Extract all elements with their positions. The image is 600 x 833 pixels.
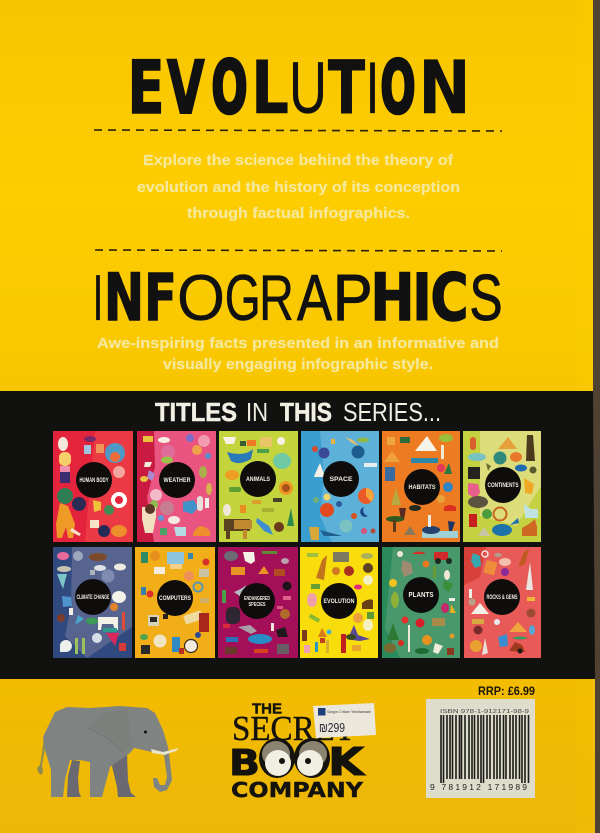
logo: The Secret Book Company: B	[229, 743, 260, 784]
book: Weather: WEATHER	[164, 477, 191, 484]
spine edge	[577, 0, 600, 833]
title: Evolution: O	[212, 46, 248, 130]
title: Infographics: G	[225, 261, 261, 334]
book: Space: SPACE	[330, 476, 353, 483]
book: Animals	[219, 431, 298, 542]
title: Infographics: H	[370, 261, 414, 336]
intro text: Explore the science behind the theory of	[143, 152, 454, 169]
icon: elephant	[37, 706, 179, 797]
book: Evolution	[300, 547, 378, 658]
book: Human Body: HUMAN BODY	[80, 477, 109, 484]
RRP price: RRP: £6.99	[478, 686, 535, 698]
book: Endangered Species: ENDANGERED	[244, 596, 270, 602]
series heading: TITLES	[155, 397, 237, 427]
intro text: through factual infographics.	[187, 205, 410, 222]
book: Rocks & Gems	[464, 547, 541, 658]
title: Infographics: I	[92, 261, 104, 334]
book: Continents	[463, 431, 541, 542]
logo: The Secret Book Company	[229, 702, 366, 802]
series heading: SERIES...	[343, 397, 441, 427]
book: Computers: COMPUTERS	[159, 595, 192, 602]
series description: visually engaging infographic style.	[163, 356, 433, 373]
title: Evolution: U	[289, 48, 327, 129]
series description: Awe-inspiring facts presented in an informative and	[97, 335, 499, 352]
book: Evolution: EVOLUTION	[324, 598, 355, 605]
series description	[97, 335, 499, 373]
book: Human Body	[53, 431, 133, 542]
logo: The Secret Book Company: THE	[252, 702, 282, 718]
title: Infographics: R	[259, 261, 294, 334]
logo: The Secret Book Company: COMPANY	[231, 778, 364, 802]
title: Infographics: P	[333, 261, 372, 334]
title: Evolution: O	[380, 46, 416, 130]
book: Plants	[382, 547, 460, 658]
price sticker	[313, 703, 376, 738]
title: Evolution: E	[128, 46, 164, 131]
book: Animals: ANIMALS	[246, 476, 271, 483]
book: Habitats	[382, 431, 460, 542]
barcode: 9 781912 171989	[430, 782, 527, 792]
title: Infographics: O	[177, 261, 225, 334]
book: Continents: CONTINENTS	[488, 482, 519, 489]
book: Climate Change: CLIMATE CHANGE	[76, 594, 110, 601]
intro text	[137, 152, 460, 222]
book: Plants: PLANTS	[408, 592, 434, 599]
book: Habitats: HABITATS	[408, 484, 436, 491]
book: Space	[301, 431, 379, 542]
title: Infographics: C	[430, 261, 468, 336]
panel: titles in this series	[0, 391, 600, 679]
series heading: IN	[246, 397, 268, 427]
barcode	[426, 699, 535, 798]
title: Evolution: V	[167, 46, 205, 131]
title: Evolution	[128, 46, 470, 131]
book: Rocks & Gems: ROCKS & GEMS	[486, 594, 518, 601]
price sticker: Sargın Critam Yetzilarısale	[327, 709, 372, 714]
book: Computers	[135, 547, 215, 658]
title: Evolution: N	[418, 46, 470, 131]
divider middle	[95, 250, 502, 251]
title: Infographics: A	[297, 261, 333, 334]
price sticker: ₪299	[319, 720, 345, 735]
series heading: THIS	[280, 397, 332, 427]
title: Infographics: F	[144, 261, 177, 336]
barcode: ISBN 978-1-912171-98-9	[440, 709, 529, 715]
title: Evolution: L	[251, 46, 289, 131]
title: Infographics: I	[412, 261, 432, 336]
book: Weather	[137, 431, 216, 542]
title: Infographics: N	[104, 261, 144, 336]
intro text: evolution and the history of its conception	[137, 179, 460, 196]
book: Climate Change	[53, 547, 132, 658]
series heading	[155, 397, 441, 427]
book: Endangered Species: SPECIES	[248, 602, 266, 608]
title: Infographics	[92, 261, 502, 336]
book: Endangered Species	[218, 547, 298, 658]
title: Evolution: I	[366, 48, 380, 129]
title: Evolution: T	[328, 46, 365, 131]
title: Infographics: S	[470, 261, 502, 334]
logo: The Secret Book Company: K	[328, 740, 366, 784]
divider top	[94, 130, 502, 131]
logo: The Secret Book Company: SECRET	[232, 709, 355, 748]
